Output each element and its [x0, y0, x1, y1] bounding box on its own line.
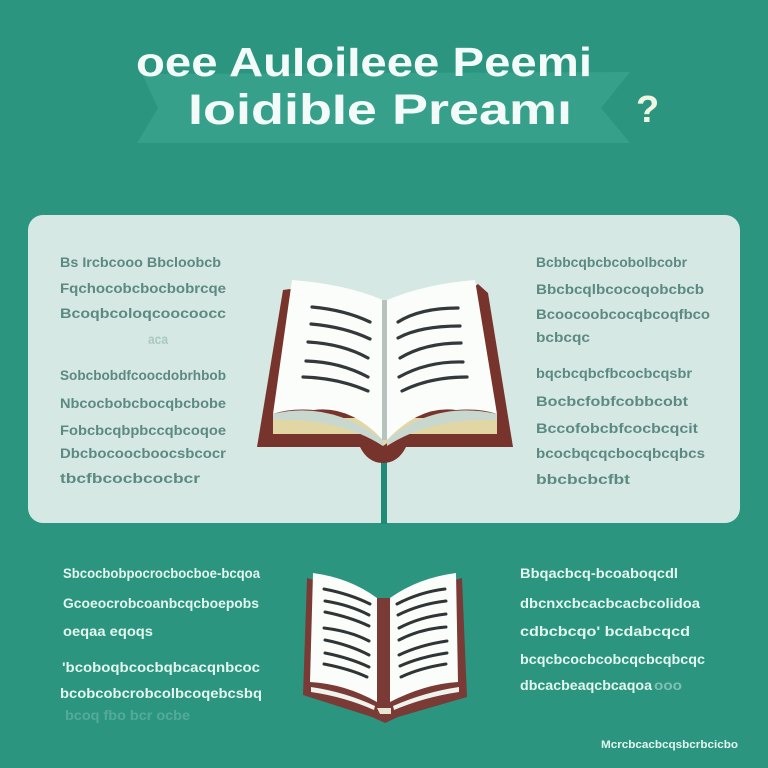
left panel text: Bcoqbcoloqcoocoocc — [60, 305, 226, 321]
left panel text: Sobcbobdfcoocdobrhbob — [60, 367, 226, 383]
left panel text: tbcfbcocbcocbcr — [60, 470, 201, 486]
bottom left text: oeqaa eqoqs — [63, 623, 153, 639]
bottom right text: dbcacbeaqcbcaqoa — [520, 677, 652, 693]
page curl right — [387, 410, 497, 446]
bottom left text: Sbcocbobpocrocbocboe-bcqoa — [63, 565, 260, 581]
title — [136, 39, 592, 134]
spine — [377, 598, 390, 708]
right panel text: bbcbcbcfbt — [536, 471, 630, 487]
bottom right text: dbcnxcbcacbcacbcolidoa — [520, 595, 700, 611]
right panel text — [536, 254, 710, 487]
title banner ribbon — [137, 72, 630, 143]
right panel text: bqcbcqbcfbcocbcqsbr — [536, 365, 693, 381]
text lines left — [324, 589, 370, 677]
right panel text: bcbcqc — [536, 329, 590, 345]
bottom right text — [520, 565, 705, 693]
right page — [390, 573, 458, 702]
right panel text: Bbcbcqlbcocoqobcbcb — [536, 281, 704, 297]
left panel text — [60, 254, 227, 486]
right panel text: bcocbqcqcbocqbcqbcs — [536, 445, 705, 461]
book cover — [257, 284, 513, 463]
text lines right — [398, 308, 467, 391]
credit line: Mcrcbcacbcqsbcrbcicbo — [601, 739, 738, 751]
right panel text: Bcoocoobcocqbcoqfbco — [536, 306, 710, 322]
right panel text: Bcbbcqbcbcobolbcobr — [536, 254, 688, 270]
book cover — [303, 578, 467, 723]
bottom right text: bcqcbcocbcobcqcbcqbcqc — [520, 651, 705, 667]
right page — [387, 280, 497, 440]
left panel text: aca — [148, 331, 168, 347]
bottom left text: bcobcobcrobcolbcoqebcsbq — [60, 685, 262, 701]
gutter — [382, 300, 387, 440]
page stack left — [311, 687, 375, 710]
title: IoidibIe Preamı — [188, 86, 572, 134]
right panel text: Bocbcfobfcobbcobt — [536, 393, 688, 409]
left panel text: Fqchocobcbocbobrcqe — [60, 280, 226, 296]
left page — [273, 280, 383, 440]
title: oee AuIoiIeee Peemi — [136, 39, 592, 85]
stem below large book — [381, 460, 387, 524]
text lines left — [303, 307, 370, 391]
bottom right text: Bbqacbcq-bcoaboqcdl — [520, 565, 678, 581]
bottom left text — [60, 565, 262, 723]
bottom left text: 'bcoboqbcocbqbcacqnbcoc — [62, 659, 260, 675]
text lines right — [397, 589, 447, 677]
cream page edges — [273, 418, 497, 446]
page stack right — [393, 687, 459, 710]
main panel — [28, 215, 740, 523]
left panel text: Nbcocbobcbocqbcbobe — [60, 395, 226, 411]
small open book icon — [303, 573, 467, 723]
question mark icon: ? — [636, 89, 659, 131]
bottom left text: Gcoeocrobcoanbcqcboepobs — [63, 595, 259, 611]
left panel text: Fobcbcqbpbccqbcoqoe — [60, 422, 226, 438]
page curl left — [273, 410, 383, 446]
large open book icon — [257, 280, 513, 463]
base page block — [377, 708, 391, 714]
bottom right text: ooo — [654, 677, 682, 693]
left page — [310, 573, 377, 702]
bottom right text: cdbcbcqo' bcdabcqcd — [520, 623, 690, 639]
right panel text: Bccofobcbfcocbcqcit — [536, 420, 698, 436]
bottom left text: bcoq fbo bcr ocbe — [65, 707, 190, 723]
left panel text: Dbcbocoocboocsbcocr — [60, 445, 227, 461]
left panel text: Bs Ircbcooo Bbcloobcb — [60, 254, 221, 270]
